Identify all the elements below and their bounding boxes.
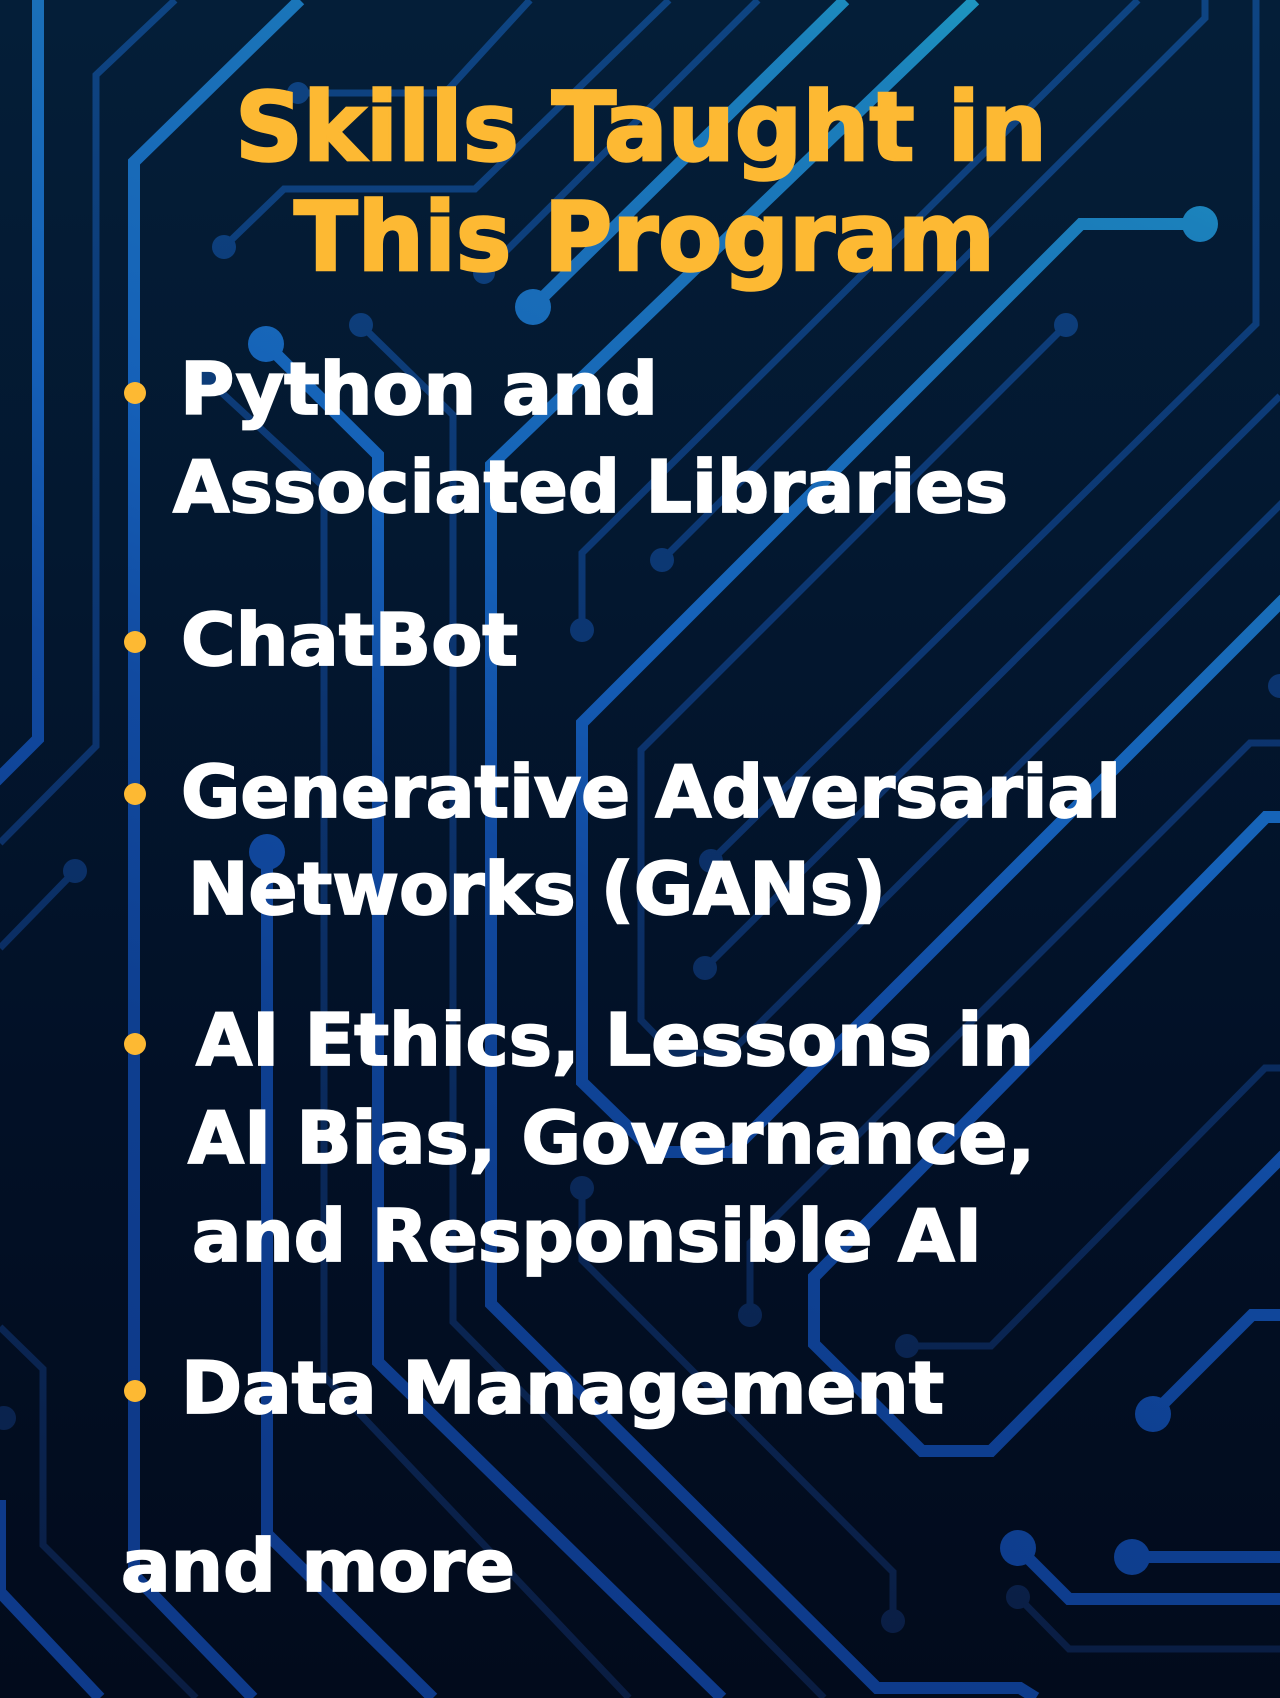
skill: Generative Adversarial Networks [124,750,1121,931]
title: This Program [294,183,995,293]
skill: Generative Adversarial Networks: Generative Adversarial [181,750,1121,834]
skill: AI Ethics: and Responsible AI [192,1194,982,1278]
skill: Python and Associated Libraries: Associated Libraries [173,445,1008,529]
skill: AI Ethics [124,998,1035,1278]
skill: AI Ethics: AI Bias, Governance, [188,1096,1035,1180]
title: Skills Taught in [235,73,1047,183]
skill: ChatBot: ChatBot [181,598,518,682]
skill: AI Ethics: AI Ethics, Lessons in [196,998,1034,1082]
skill: Python and Associated Libraries [124,347,1008,529]
title [235,73,1047,293]
skill: Python and Associated Libraries: Python and [180,347,658,431]
skill: Data Management: Data Management [181,1346,944,1430]
bullet list of skills [121,347,1121,1608]
skill: Generative Adversarial Networks: Networks (GANs) [188,847,886,931]
closing text: and more: and more [121,1524,515,1608]
